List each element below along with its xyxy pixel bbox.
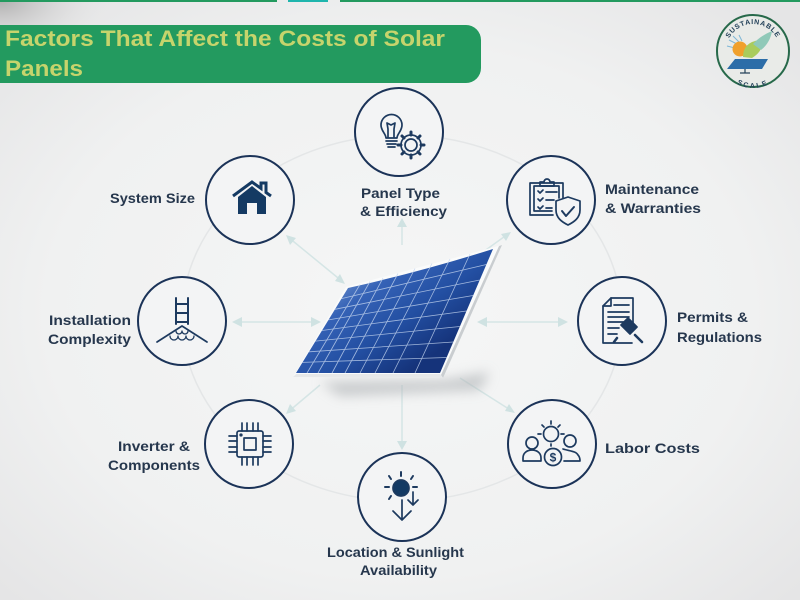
label: System Size [110, 190, 195, 206]
factor: installation complexity [48, 277, 226, 365]
panel shadow [320, 372, 490, 396]
label [605, 181, 701, 216]
label [677, 309, 762, 345]
label: & Efficiency [360, 203, 447, 219]
icon: workers, sun and coin [523, 421, 580, 466]
label: Panel Type [361, 185, 440, 201]
label [48, 312, 131, 347]
title banner: Factors That Affect the Costs of Solar [5, 26, 445, 51]
icon: microchip [229, 423, 271, 465]
icon: house [233, 182, 271, 214]
panel frame [293, 245, 502, 378]
label: Inverter & [118, 438, 190, 454]
label [108, 438, 200, 473]
factor: panel type and efficiency [355, 88, 447, 219]
label: Regulations [677, 329, 762, 345]
factor: inverter and components [108, 400, 293, 488]
logo: Sustainable Scale [716, 14, 790, 88]
title banner: Panels [5, 56, 83, 81]
label: Installation [49, 312, 131, 328]
label [360, 185, 447, 219]
label: Maintenance [605, 181, 699, 197]
icon: ladder on roof [157, 298, 207, 342]
connector arrows [232, 218, 568, 450]
title banner [0, 25, 481, 83]
icon: lightbulb and gear [381, 114, 424, 158]
label: Location & Sunlight [327, 544, 464, 560]
label [327, 544, 464, 578]
icon: document and gavel [603, 298, 642, 343]
photovoltaic cells [296, 249, 493, 373]
icon: workers, sun and coin: $ [550, 450, 557, 464]
factor: labor costs [508, 400, 700, 488]
label: Components [108, 457, 200, 473]
factor: system size [110, 156, 294, 244]
factor: maintenance and warranties [507, 156, 701, 244]
label: Complexity [48, 331, 131, 347]
logo: Sustainable Scale: SCALE [738, 80, 767, 88]
logo: Sustainable Scale: SUSTAINABLE [726, 19, 780, 38]
icon: sun with arrows [385, 472, 418, 520]
label: Availability [360, 562, 437, 578]
label: Labor Costs [605, 440, 700, 456]
factor: location and sunlight availability [327, 453, 464, 578]
factor: permits and regulations [578, 277, 762, 365]
orbit ring [182, 135, 622, 501]
icon: clipboard and shield [530, 179, 580, 225]
label: & Warranties [605, 200, 701, 216]
solar panel [293, 245, 502, 396]
label: Permits & [677, 309, 748, 325]
